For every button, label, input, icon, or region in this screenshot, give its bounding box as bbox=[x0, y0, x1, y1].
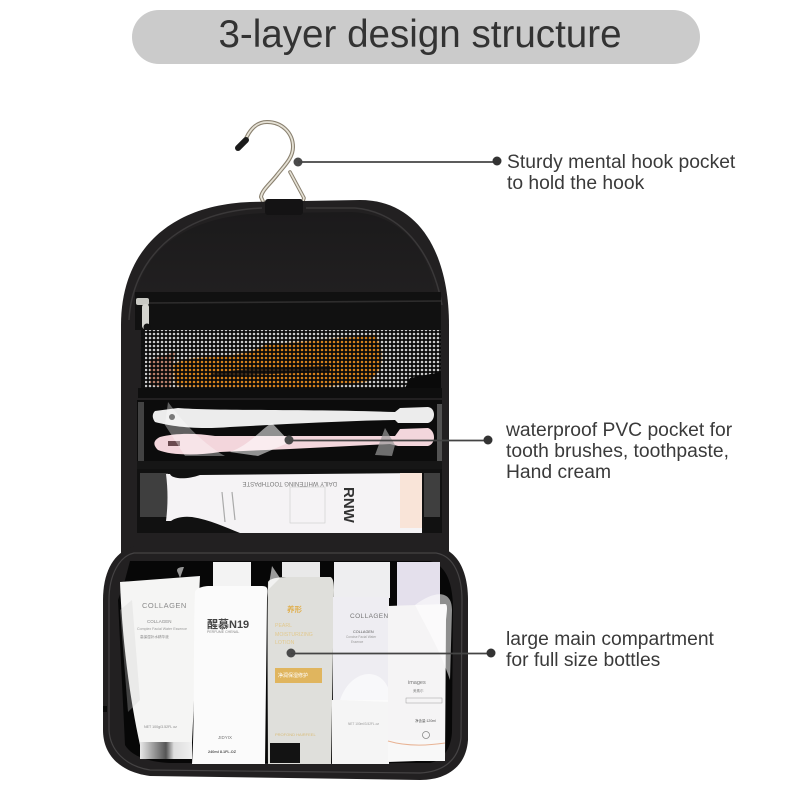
tab leather bbox=[270, 743, 300, 763]
label text: to hold the hook bbox=[507, 173, 645, 194]
bottle 4: collagen: Essence bbox=[351, 640, 363, 644]
bottle 5: images lotion bbox=[388, 562, 447, 762]
bottle 4: collagen bbox=[332, 562, 390, 764]
label text: Sturdy mental hook pocket bbox=[507, 152, 736, 173]
bottle 3: moisturizing lotion: LOTION bbox=[275, 640, 295, 646]
toothbrush pink bbox=[154, 428, 434, 454]
bottle 1: tube bbox=[120, 576, 200, 759]
flap inner bbox=[136, 212, 435, 320]
leader line bbox=[284, 436, 492, 444]
zipper band bbox=[135, 292, 441, 330]
label text: for full size bottles bbox=[506, 650, 660, 671]
bottle 3: moisturizing lotion: 养形 bbox=[287, 604, 302, 614]
toothpaste tube bbox=[166, 473, 422, 533]
bottle 2: perfume chenal: JIDYIX bbox=[218, 735, 232, 740]
bottle 2: perfume chenal: 240ml 8.1FL.OZ bbox=[208, 750, 237, 754]
label text: large main compartment bbox=[506, 629, 715, 650]
bottle 5: images lotion: images bbox=[408, 680, 426, 686]
leader line bbox=[286, 648, 496, 658]
leader line bbox=[294, 156, 502, 166]
label text: waterproof PVC pocket for bbox=[505, 420, 733, 441]
bottle 4: collagen: NET 100ml/3.52FL.oz bbox=[348, 722, 379, 726]
bottle 4: collagen: COLLAGEN bbox=[353, 630, 374, 634]
bottle 3: moisturizing lotion: MOISTURIZING bbox=[275, 632, 313, 638]
reflections bbox=[177, 567, 184, 578]
bottle 5: images lotion: 美素尔 bbox=[413, 688, 424, 693]
bottle 5: images lotion: 净含量:120ml bbox=[415, 718, 436, 723]
bottle 3: moisturizing lotion bbox=[268, 562, 334, 764]
callout: hook bbox=[294, 152, 736, 194]
flap stitching bbox=[129, 208, 442, 320]
bottle 3: moisturizing lotion: 净润保湿修护 bbox=[278, 672, 308, 679]
label text: Hand cream bbox=[506, 462, 611, 483]
bottle 1: tube: COLLAGEN bbox=[142, 601, 187, 610]
hook tab bbox=[265, 199, 303, 215]
title pill bbox=[132, 10, 700, 64]
icon: zipper pull bbox=[136, 298, 150, 330]
bag back panel bbox=[121, 200, 449, 560]
main compartment bbox=[103, 546, 468, 780]
lower PVC pocket with toothpaste: RNW bbox=[340, 487, 357, 524]
reflection bbox=[165, 402, 225, 456]
product: hanging toiletry bag bbox=[103, 122, 468, 780]
label text: tooth brushes, toothpaste, bbox=[506, 441, 729, 462]
PVC pocket with toothbrushes bbox=[137, 400, 442, 469]
bottle 4: collagen: Concise Facial Water bbox=[346, 635, 377, 639]
bottle 1: tube: Complex Facial Water Essence bbox=[137, 627, 187, 631]
bottle 1: tube: NET 100g/3.52FL oz bbox=[144, 725, 177, 729]
lower PVC pocket with toothpaste bbox=[137, 469, 442, 533]
bottle 1: tube: COLLAGEN bbox=[147, 619, 172, 624]
bottle 2: perfume chenal: 醒慕N19 bbox=[207, 617, 249, 631]
bottle 3: moisturizing lotion: PROFOND HAIRFEEL bbox=[275, 732, 316, 737]
bottle 2: perfume chenal: PERFUME CHENAL bbox=[207, 630, 239, 634]
bottle 3: moisturizing lotion: PEARL bbox=[275, 623, 292, 629]
title: 3-layer design structure bbox=[218, 13, 622, 56]
icon: metal hook bbox=[238, 122, 304, 207]
callout: main compartment bbox=[286, 629, 715, 671]
bottle 2: perfume chenal bbox=[192, 562, 268, 764]
callout: PVC pocket bbox=[284, 420, 733, 483]
bottle 4: collagen: COLLAGEN bbox=[350, 613, 389, 620]
toothbrush white bbox=[153, 407, 434, 428]
mesh pocket bbox=[138, 330, 442, 398]
bottle 1: tube: 高保湿补水精华液 bbox=[140, 634, 169, 639]
lower PVC pocket with toothpaste: DAILY WHITENING TOOTHPASTE bbox=[243, 480, 337, 486]
